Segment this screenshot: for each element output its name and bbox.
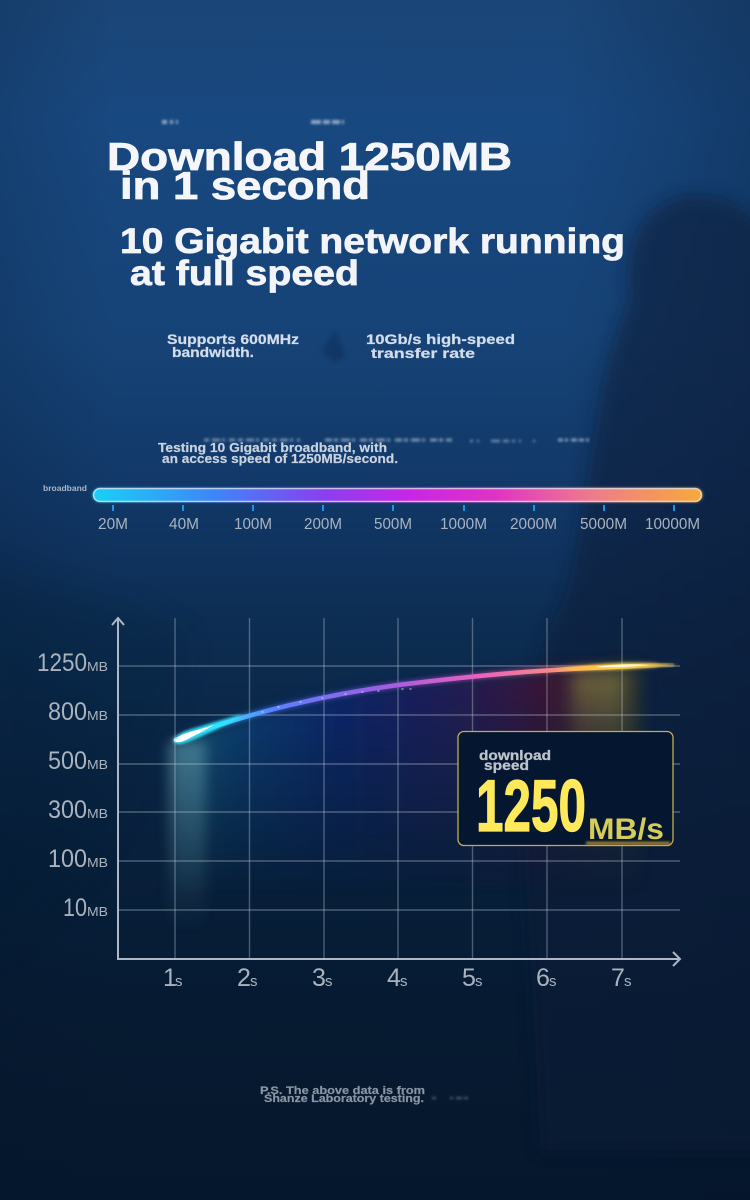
y-axis labels: MB	[87, 904, 108, 919]
title	[107, 136, 512, 208]
axes	[112, 618, 680, 966]
y-axis labels: MB	[87, 708, 108, 723]
y-axis labels: 10	[63, 894, 87, 922]
x-axis labels	[163, 964, 632, 992]
area glow under curve	[162, 659, 646, 904]
y-axis labels: 1250	[37, 649, 87, 677]
x-axis labels: s	[250, 973, 258, 990]
x-axis labels: s	[475, 973, 482, 990]
subtitle	[120, 222, 625, 293]
y-axis labels: MB	[87, 757, 108, 772]
scale values: 5000M	[580, 516, 627, 533]
callout unit: MB/s	[588, 813, 664, 846]
x-axis labels: 7	[611, 964, 625, 992]
subtitle: 10 Gigabit network running	[120, 222, 625, 261]
scale values: 200M	[304, 516, 342, 533]
scale values	[98, 516, 700, 533]
scale values: 100M	[234, 516, 272, 533]
y-axis labels: MB	[87, 806, 108, 821]
speed chart	[37, 618, 680, 992]
speed curve	[175, 663, 678, 743]
y-axis labels: 500	[48, 747, 87, 775]
callout: download speed	[458, 732, 673, 847]
x-axis labels: 6	[536, 964, 550, 992]
x-axis labels: 1	[163, 964, 177, 992]
y-axis labels: 800	[48, 698, 87, 726]
feature: bandwidth: bandwidth.	[172, 344, 254, 360]
x-axis labels: s	[549, 973, 556, 990]
scale values: 10000M	[645, 516, 700, 533]
y-axis labels: 300	[48, 796, 87, 824]
footnote	[260, 1085, 425, 1105]
x-axis labels: s	[175, 973, 182, 990]
scale values: 500M	[374, 516, 412, 533]
title: Download 1250MB	[107, 136, 512, 179]
x-axis labels: s	[400, 973, 408, 990]
feature: transfer rate: transfer rate	[371, 345, 475, 361]
feature: bandwidth	[167, 331, 299, 360]
subtitle: at full speed	[130, 254, 359, 293]
scale values: 20M	[98, 516, 128, 533]
x-axis labels: 4	[387, 964, 401, 992]
y-axis labels: 100	[48, 845, 87, 873]
x-axis labels: 2	[237, 964, 251, 992]
test description: an access speed of 1250MB/second.	[162, 452, 398, 466]
gradient bar	[92, 488, 703, 502]
callout label: download	[479, 747, 551, 763]
callout label	[479, 747, 551, 773]
feature: bandwidth: Supports 600MHz	[167, 331, 299, 347]
x-axis labels: s	[325, 973, 332, 990]
callout value: 1250	[476, 766, 586, 847]
y-axis labels: MB	[87, 659, 108, 674]
x-axis labels: 3	[312, 964, 326, 992]
y-axis labels	[37, 649, 108, 922]
callout label: speed	[484, 757, 529, 773]
x-axis labels: s	[624, 973, 632, 990]
scale values: 40M	[169, 516, 199, 533]
footnote: P.S. The above data is from	[260, 1085, 425, 1097]
broadband scale	[43, 484, 703, 533]
feature: transfer rate: 10Gb/s high-speed	[366, 331, 515, 347]
scale values: 2000M	[510, 516, 557, 533]
footnote: Shanze Laboratory testing.	[264, 1093, 424, 1105]
test description: Testing 10 Gigabit broadband, with	[158, 441, 387, 455]
x-axis labels: 5	[462, 964, 476, 992]
test description	[158, 441, 398, 466]
feature: transfer rate	[366, 331, 515, 361]
title: in 1 second	[120, 165, 370, 208]
scale values: 1000M	[440, 516, 487, 533]
scale label: broadband	[43, 484, 87, 493]
y-axis labels: MB	[87, 855, 108, 870]
